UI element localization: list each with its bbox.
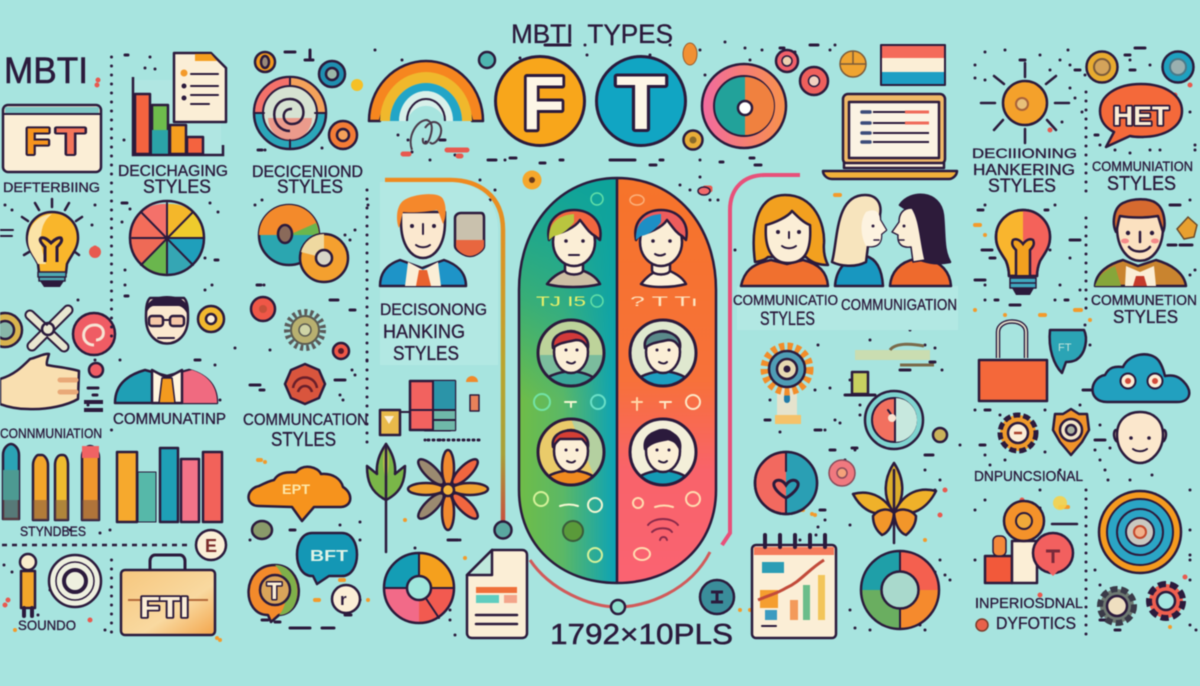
icon: small blue speech [1050, 330, 1086, 373]
icon: red gear [1149, 584, 1183, 618]
chart: ring spiral [254, 77, 326, 149]
panel: far left column [0, 50, 115, 633]
icon: gold ring top [1086, 52, 1118, 82]
icon: two-tone bulb [996, 210, 1050, 295]
label: inperiosdnal dyfotics: INPERIOSDNAL [975, 595, 1083, 612]
icon: grey gear [1100, 589, 1134, 623]
icon: red spiral [73, 313, 115, 355]
label: communetion styles [1091, 293, 1197, 327]
letter T: T [616, 61, 666, 146]
icon: large target [1099, 491, 1181, 573]
icon: T badge: T [267, 578, 282, 605]
icon: dark teal T circle [700, 580, 734, 614]
chart: overlapping discs [259, 205, 348, 282]
icon: dark-haired woman [890, 195, 951, 286]
icon: orange gear one [1000, 415, 1036, 451]
label: 1792×10PLS: 1792×10PLS [550, 619, 733, 651]
icon: light bulb [0, 199, 101, 287]
marks row one [536, 193, 698, 309]
face: circle two right [630, 320, 696, 391]
label: deciion hankering styles: STYLES [988, 176, 1056, 197]
label: stynbes: STYNDBES [20, 523, 86, 539]
icon: orange shopping bag [979, 322, 1047, 401]
chart: ring donut [702, 64, 786, 148]
icon: gold ring [0, 313, 22, 347]
icon: small red dot [976, 619, 988, 631]
icon: small olive barrel [252, 521, 272, 539]
icon: blue ring [319, 61, 345, 87]
chart: pie [130, 201, 204, 275]
face: circle two left [538, 320, 604, 391]
icon: speech bubble HET [1100, 84, 1182, 147]
icon: orange tag [1177, 217, 1197, 239]
panel: lower center-left icons [367, 444, 527, 638]
icon: red circle [251, 297, 275, 321]
label: communcation styles: COMMUNCATION [243, 410, 368, 429]
icon: figure [20, 554, 36, 616]
bar chart: five bars [117, 448, 222, 522]
icon: gold coin [198, 306, 224, 332]
face: top right [635, 210, 687, 287]
label: communicatio styles: COMMUNICATIO [733, 293, 838, 309]
label: dnpuncsional: DNPUNCSIONAL [974, 468, 1083, 485]
icon: blonde woman [832, 195, 886, 286]
marks row two [534, 394, 700, 410]
label: FT: T [56, 121, 86, 162]
panel: right columns [972, 52, 1197, 636]
label: communatinp: COMMUNATINP [113, 411, 226, 428]
chart: calendar [752, 535, 836, 638]
arrow: right-pointing [1052, 523, 1077, 525]
icon: orange cloud EPT [248, 467, 350, 521]
icon: coral blob [698, 187, 710, 195]
icon: red ring small [800, 67, 828, 95]
face: circle three left [538, 419, 604, 490]
label: decichaging styles: STYLES [143, 177, 211, 198]
label: deciion hankering styles: HANKERING [973, 162, 1075, 179]
label: communiation styles: STYLES [1107, 173, 1176, 195]
icon: yellow dot [351, 79, 363, 91]
label: inperiosdnal dyfotics [975, 595, 1083, 633]
label: communicatio styles: STYLES [760, 309, 815, 330]
icon: gold small ring [684, 130, 702, 150]
icon: crossed tools [30, 310, 68, 347]
label: decicenion styles: DECICENIOND [252, 163, 363, 181]
icon: sun [981, 63, 1069, 143]
label: HET: HET [1113, 101, 1170, 131]
label: decisononng hanking styles: HANKING [383, 321, 465, 343]
label: connuniation: CONNMUNIATION [0, 425, 102, 441]
panel backdrop [737, 286, 958, 330]
bar chart: falling bars [133, 77, 223, 155]
icon: small T coin [332, 585, 360, 613]
panel: central figures [369, 19, 800, 651]
label: deciion hankering styles: DECIIIONING [972, 145, 1077, 161]
icon: leaf [367, 444, 405, 552]
bottom connector arc [530, 552, 710, 614]
panel backdrop [380, 182, 498, 365]
icon: tiny figure [470, 395, 479, 411]
label: decisononng hanking styles [380, 300, 487, 365]
icon: yellow burst [1053, 496, 1067, 510]
icon: orange ring [329, 121, 357, 149]
icon: orange gear with handle [765, 347, 809, 424]
label: decichaging styles: DECICHAGING [118, 163, 228, 180]
panel: second column [2, 53, 228, 636]
label: communiation styles: COMMUNIATION [1092, 158, 1193, 174]
icon: orange orb [840, 51, 866, 77]
icon: laptop [823, 94, 957, 179]
icon: F circle [496, 56, 584, 146]
icon: target [49, 555, 101, 607]
icon: flower [408, 450, 488, 530]
panel: third column [243, 52, 368, 622]
icon: blue speech BFT [297, 533, 357, 584]
label: FTI: FTI [140, 592, 189, 624]
label: dotted text row [428, 438, 480, 442]
marks row three [534, 492, 700, 562]
label: FT: F [25, 121, 50, 162]
left connector line [385, 180, 503, 522]
label: deciion hankering styles [972, 145, 1077, 197]
label: communcation styles [243, 410, 368, 451]
icon: rainbow [369, 61, 483, 121]
right connector line [722, 175, 800, 545]
icon: T circle [596, 56, 686, 146]
label: EPT: EPT [282, 481, 310, 497]
label: decicenion styles [252, 163, 363, 198]
icon: gold ring [933, 428, 947, 442]
icon: pink ring [829, 460, 855, 486]
icon: flag [881, 45, 945, 85]
icon: E badge [196, 530, 226, 560]
icon: small T coin: r [340, 590, 347, 609]
icon: blue ring top [1162, 52, 1194, 82]
icon: document with lines [467, 550, 527, 638]
connector node [494, 522, 512, 538]
label: communiation styles [1092, 158, 1193, 195]
icon: small blue speech: FT [1058, 342, 1072, 354]
icon: teal ring [479, 52, 495, 68]
face: circle three right [630, 419, 696, 490]
icon: orange seed [683, 43, 697, 65]
icon: smiling man [380, 194, 466, 286]
label: sound: SOUNDO [18, 617, 76, 633]
label: BFT: BFT [310, 548, 348, 565]
icon: small orange burst [255, 52, 275, 72]
chart: large donut [861, 551, 939, 629]
icon: man with glasses [115, 296, 217, 403]
icon: bald head [1114, 412, 1166, 463]
marks row one: TJ I5 [536, 293, 586, 309]
label: decisononng hanking styles: DECISONONG [380, 300, 487, 319]
face: top left [547, 210, 601, 287]
icon: orange gear two [1053, 409, 1089, 455]
icon: scribble [411, 120, 441, 150]
icon: window with FT [3, 105, 101, 172]
icon: orange small ring [522, 170, 542, 190]
chart: central pill [519, 178, 716, 583]
icon: E badge: E [205, 536, 217, 556]
label: communcation styles: STYLES [271, 429, 336, 451]
icon: orange dome [466, 376, 478, 382]
icon: woman [741, 195, 828, 286]
title: MBTI TYPES: MBTI TYPES [511, 19, 673, 49]
letter F: F [522, 61, 565, 146]
icon: clock [865, 391, 923, 449]
icon: T badge [249, 565, 299, 622]
label: FT [25, 121, 86, 162]
label: inperiosdnal dyfotics: DYFOTICS [996, 613, 1076, 633]
icon: grey gear [287, 312, 323, 348]
chart: donut [384, 553, 454, 623]
icon: pink ring [776, 50, 798, 72]
icon: golden leaf [853, 463, 936, 543]
chart: heart disc [755, 452, 817, 514]
icon: four pegs [3, 444, 99, 520]
icon: camera [455, 213, 484, 256]
icon: color grid [380, 381, 455, 435]
label: deftering: DEFTERBIING [3, 179, 100, 195]
panel: right of pill [733, 45, 958, 638]
label: communicatio styles [733, 293, 838, 330]
icon: red concentric badge [285, 364, 325, 404]
label: decicenion styles: STYLES [277, 177, 343, 198]
icon: happy man [1095, 199, 1186, 286]
icon: document [174, 53, 226, 122]
label: decisononng hanking styles: STYLES [393, 343, 459, 365]
icon: hand [0, 354, 103, 412]
panel: decision panel left of pill [380, 182, 498, 440]
icon: briefcase FTI [121, 555, 215, 635]
label: decichaging styles [118, 163, 228, 198]
icon: red ring [333, 343, 349, 359]
icon: chip note [852, 344, 934, 394]
label: communetion styles: STYLES [1113, 307, 1178, 327]
heading: MBTI: MBTI [4, 50, 88, 91]
marks row one: ? T Tı [630, 293, 698, 309]
icon: orange circle on bars [985, 501, 1073, 583]
label: communetion styles: COMMUNETION [1091, 293, 1197, 309]
label: communigation: COMMUNIGATION [841, 297, 957, 314]
icon: teal cloud with eyes [1092, 354, 1189, 402]
